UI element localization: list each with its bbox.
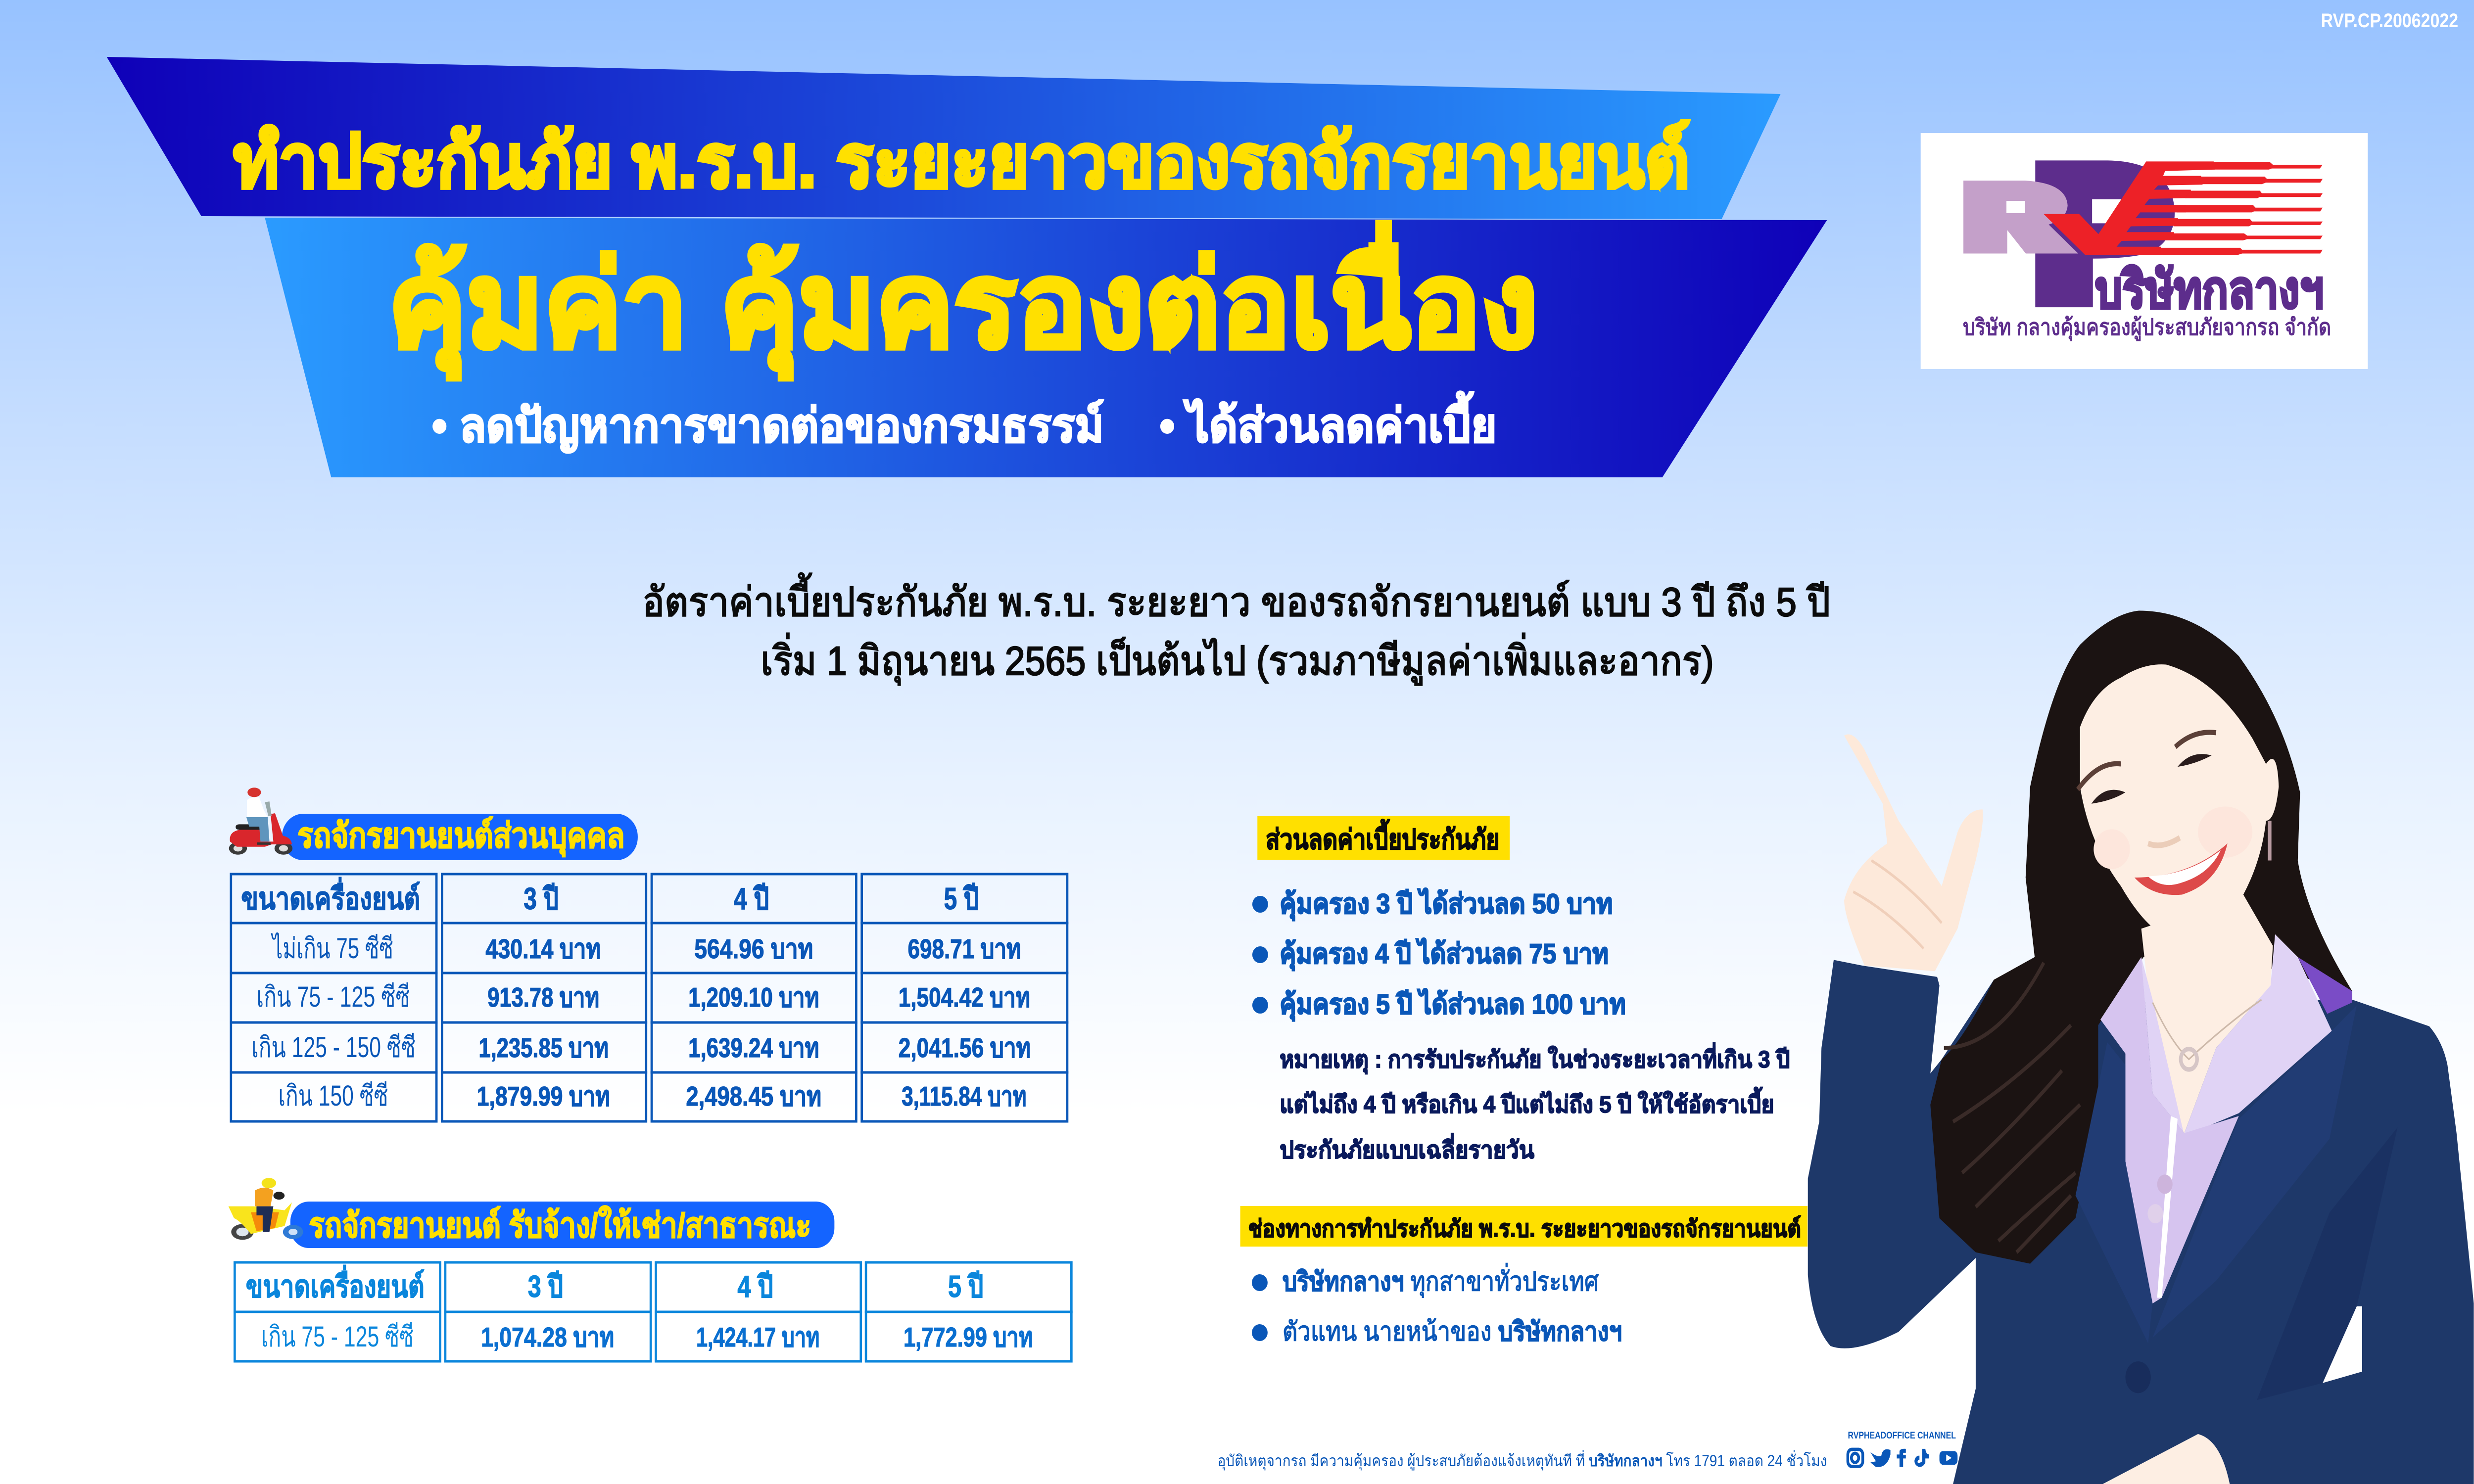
table: personal motorcycle rates: 3 ปี xyxy=(523,881,559,916)
social channel: RVPHEADOFFICE CHANNEL xyxy=(1848,1430,1956,1440)
table: commercial motorcycle rates: 1,074.28 บาท xyxy=(481,1323,614,1352)
table: personal motorcycle rates: 698.71 บาท xyxy=(907,934,1021,964)
table: commercial motorcycle rates: 3 ปี xyxy=(528,1269,563,1303)
hand creases xyxy=(1853,861,1942,949)
panel: channels: ช่องทางการทำประกันภัย พ.ร.บ. ระยะยาวของรถจักรยานยนต์ xyxy=(1248,1215,1801,1242)
teeth xyxy=(2148,850,2221,885)
document code: RVP.CP.20062022 xyxy=(2321,10,2458,32)
panel: discounts: คุ้มครอง 3 ปี ได้ส่วนลด 50 บาท xyxy=(1280,887,1613,922)
table: personal motorcycle rates: เกิน 125 - 150 ซีซี xyxy=(251,1031,416,1063)
table: personal motorcycle rates: 913.78 บาท xyxy=(487,983,599,1013)
icon: yellow motorcycle taxi xyxy=(229,1178,303,1240)
panel: discounts xyxy=(1252,816,1790,1163)
banner: top headline: ทำประกันภัย พ.ร.บ. ระยะยาวของรถจักรยานยนต์ xyxy=(234,120,1690,203)
logo: RVP company xyxy=(1921,133,2368,369)
pendant xyxy=(2181,1049,2197,1069)
logo: RVP company: บริษัทกลางฯ xyxy=(2095,261,2324,319)
hair highlights xyxy=(1944,963,2080,1252)
badge: commercial motorcycles: รถจักรยานยนต์ รับจ้าง/ให้เช่า/สาธารณะ xyxy=(309,1205,811,1245)
footer note: อุบัติเหตุจากรถ มีความคุ้มครอง ผู้ประสบภัยต้องแจ้งเหตุทันที ที่ บริษัทกลางฯ โทร 1791 ตลอด 24 ชั่วโมง xyxy=(1218,1450,1827,1471)
table: commercial motorcycle rates: ขนาดเครื่องยนต์ xyxy=(246,1265,425,1303)
face xyxy=(2080,664,2279,941)
table: commercial motorcycle rates: 5 ปี xyxy=(948,1269,983,1303)
earring xyxy=(2268,821,2272,861)
social channel xyxy=(1848,1430,1957,1467)
shirt placket xyxy=(2157,1116,2178,1298)
mouth xyxy=(2135,843,2228,895)
panel: channels xyxy=(1240,1206,1808,1346)
table: personal motorcycle rates: 1,235.85 บาท xyxy=(478,1033,609,1063)
table: personal motorcycle rates: 564.96 บาท xyxy=(694,934,813,964)
icon: facebook xyxy=(1897,1449,1906,1467)
table: personal motorcycle rates: 1,639.24 บาท xyxy=(688,1033,819,1063)
icon: youtube xyxy=(1940,1451,1957,1465)
nose xyxy=(2148,838,2180,845)
panel: discounts: แต่ไม่ถึง 4 ปี หรือเกิน 4 ปีแต่ไม่ถึง 5 ปี ให้ใช้อัตราเบี้ย xyxy=(1280,1086,1774,1117)
blazer button xyxy=(2125,1361,2151,1393)
lower hand xyxy=(2103,1434,2230,1484)
table: personal motorcycle rates: เกิน 150 ซีซี xyxy=(278,1079,388,1112)
icon: twitter xyxy=(1870,1449,1891,1467)
icon: instagram xyxy=(1848,1449,1863,1466)
lapels xyxy=(2076,1042,2152,1343)
jacket xyxy=(1808,960,2474,1484)
table: personal motorcycle rates: 3,115.84 บาท xyxy=(902,1082,1026,1112)
icon: tiktok xyxy=(1914,1449,1929,1467)
panel: discounts: คุ้มครอง 4 ปี ได้ส่วนลด 75 บาท xyxy=(1280,937,1609,972)
banner: main headline: คุ้มค่า คุ้มครองต่อเนื่อง xyxy=(388,222,1538,379)
table: personal motorcycle rates xyxy=(231,874,1067,1121)
heading: premium rates: เริ่ม 1 มิถุนายน 2565 เป็นต้นไป (รวมภาษีมูลค่าเพิ่มและอากร) xyxy=(761,633,1714,686)
panel: discounts: ประกันภัยแบบเฉลี่ยรายวัน xyxy=(1280,1133,1534,1163)
table: personal motorcycle rates: เกิน 75 - 125 ซีซี xyxy=(256,980,410,1013)
table: commercial motorcycle rates: เกิน 75 - 125 ซีซี xyxy=(261,1320,414,1352)
eyes xyxy=(2092,754,2212,804)
banner: main headline: • ได้ส่วนลดค่าเบี้ย xyxy=(1159,391,1497,452)
shirt collar xyxy=(2141,934,2332,1136)
panel: discounts: หมายเหตุ : การรับประกันภัย ในช่วงระยะเวลาที่เกิน 3 ปี xyxy=(1280,1042,1790,1074)
shirt front xyxy=(2100,957,2239,1306)
collar inside xyxy=(2298,957,2352,1014)
hair back xyxy=(1930,610,2352,1264)
table: personal motorcycle rates: 2,041.56 บาท xyxy=(899,1033,1031,1063)
arm gap xyxy=(2323,1306,2362,1383)
panel: discounts: คุ้มครอง 5 ปี ได้ส่วนลด 100 บาท xyxy=(1280,988,1626,1022)
hand xyxy=(1844,734,1983,971)
illustration: smiling woman in navy blazer xyxy=(1808,610,2474,1484)
table: personal motorcycle rates: ไม่เกิน 75 ซีซี xyxy=(271,932,393,964)
shirt buttons xyxy=(2157,1174,2173,1194)
table: personal motorcycle rates: 1,879.99 บาท xyxy=(477,1082,610,1112)
table: personal motorcycle rates: 4 ปี xyxy=(734,881,769,916)
banner: main headline: • ลดปัญหาการขาดต่อของกรมธรรม์ xyxy=(432,399,1104,454)
table: personal motorcycle rates: 430.14 บาท xyxy=(485,934,601,964)
heading: premium rates: อัตราค่าเบี้ยประกันภัย พ.ร.บ. ระยะยาว ของรถจักรยานยนต์ แบบ 3 ปี ถึง 5 ปี xyxy=(642,573,1830,625)
table: personal motorcycle rates: 1,504.42 บาท xyxy=(899,983,1030,1013)
banner: top headline xyxy=(107,57,1781,219)
table: commercial motorcycle rates: 1,424.17 บาท xyxy=(696,1323,819,1352)
table: commercial motorcycle rates xyxy=(235,1262,1071,1361)
table: personal motorcycle rates: 1,209.10 บาท xyxy=(688,983,819,1013)
jacket shadows xyxy=(2257,1127,2398,1400)
heading: premium rates xyxy=(642,573,1830,686)
blush xyxy=(2198,806,2252,858)
table: personal motorcycle rates: 5 ปี xyxy=(944,881,979,916)
panel: discounts: ส่วนลดค่าเบี้ยประกันภัย xyxy=(1266,819,1500,855)
neck and chest xyxy=(2141,894,2273,1133)
eyebrows xyxy=(2078,732,2216,789)
necklace xyxy=(2152,1000,2261,1059)
table: personal motorcycle rates: 2,498.45 บาท xyxy=(686,1082,821,1112)
table: commercial motorcycle rates: 4 ปี xyxy=(737,1269,773,1303)
table: personal motorcycle rates: ขนาดเครื่องยนต์ xyxy=(241,877,420,916)
table: commercial motorcycle rates: 1,772.99 บาท xyxy=(904,1323,1033,1352)
panel: channels: ตัวแทน นายหน้าของ บริษัทกลางฯ xyxy=(1283,1317,1622,1346)
badge: personal motorcycles: รถจักรยานยนต์ส่วนบุคคล xyxy=(297,816,625,857)
icon: red scooter xyxy=(229,788,292,855)
logo: RVP company: บริษัท กลางคุ้มครองผู้ประสบภัยจากรถ จำกัด xyxy=(1963,315,2331,341)
banner: main headline xyxy=(265,218,1827,477)
panel: channels: บริษัทกลางฯ ทุกสาขาทั่วประเทศ xyxy=(1283,1263,1599,1298)
